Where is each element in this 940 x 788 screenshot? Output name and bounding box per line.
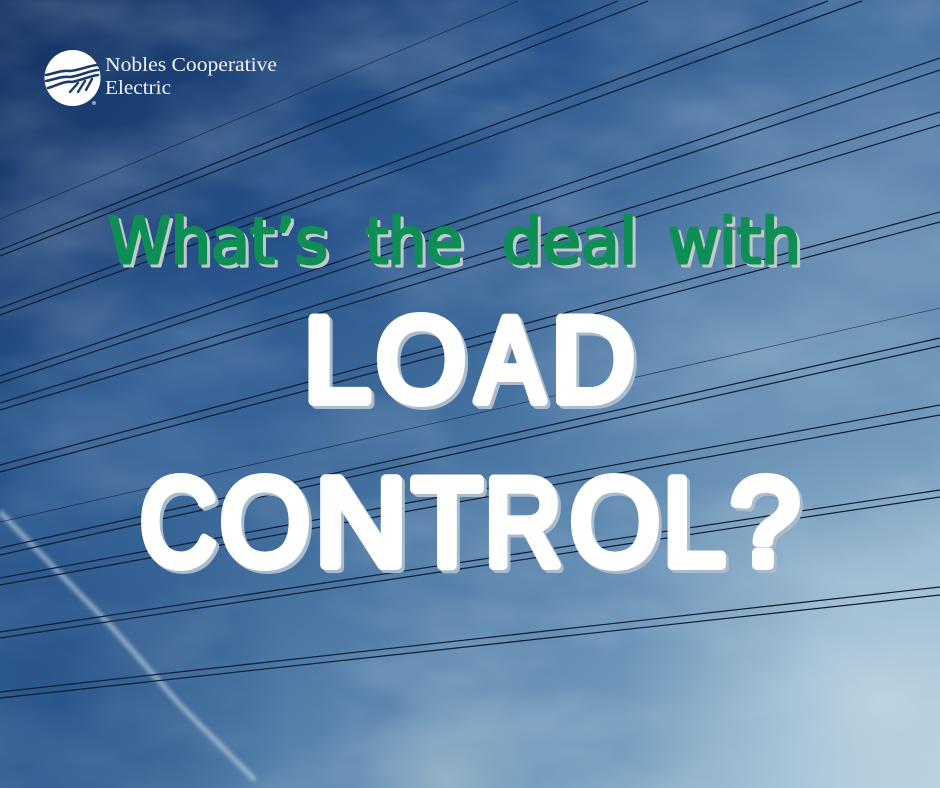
heading: What's the deal with: deal (502, 205, 637, 278)
heading: CONTROL?: ? (734, 457, 802, 595)
heading: What's the deal with: What’s (108, 205, 328, 278)
heading: LOAD: D (551, 293, 635, 427)
heading: CONTROL?: N (315, 453, 407, 592)
heading: CONTROL?: L (666, 456, 728, 594)
logo wordmark: Nobles Cooperative (105, 55, 277, 76)
heading: LOAD: L (304, 293, 370, 427)
heading: What's the deal with: the (368, 208, 466, 281)
heading: LOAD: O (376, 293, 466, 427)
heading: CONTROL?: T (415, 457, 485, 595)
heading: LOAD: L (307, 296, 373, 430)
heading: LOAD (304, 293, 638, 430)
heading: LOAD: D (554, 296, 638, 430)
contrail (0, 512, 255, 780)
logo wordmark (105, 55, 277, 99)
heading: LOAD: A (479, 297, 547, 430)
heading: CONTROL?: R (487, 455, 565, 595)
logo wordmark: Electric (105, 78, 171, 99)
heading: CONTROL?: T (412, 454, 482, 592)
icon: co-op emblem (44, 50, 100, 106)
heading: LOAD: O (379, 296, 469, 430)
heading: CONTROL?: ? (731, 454, 799, 592)
heading: CONTROL?: L (663, 453, 725, 591)
heading: CONTROL?: O (223, 457, 313, 595)
heading: What's the deal with (108, 205, 804, 281)
heading: CONTROL?: O (573, 457, 663, 595)
heading: CONTROL?: N (318, 456, 410, 595)
heading: What's the deal with: deal (505, 208, 640, 281)
heading: What's the deal with: with (671, 208, 804, 281)
heading: CONTROL?: R (484, 452, 562, 592)
heading: What's the deal with: What’s (111, 208, 331, 281)
heading: CONTROL?: C (143, 457, 219, 595)
heading: CONTROL?: O (570, 454, 660, 592)
heading: LOAD: A (476, 294, 544, 427)
heading: CONTROL?: O (220, 454, 310, 592)
heading: CONTROL?: C (140, 454, 216, 592)
heading: What's the deal with: the (365, 205, 463, 278)
logo (44, 50, 277, 106)
heading: What's the deal with: with (668, 205, 801, 278)
heading: CONTROL? (140, 452, 802, 595)
